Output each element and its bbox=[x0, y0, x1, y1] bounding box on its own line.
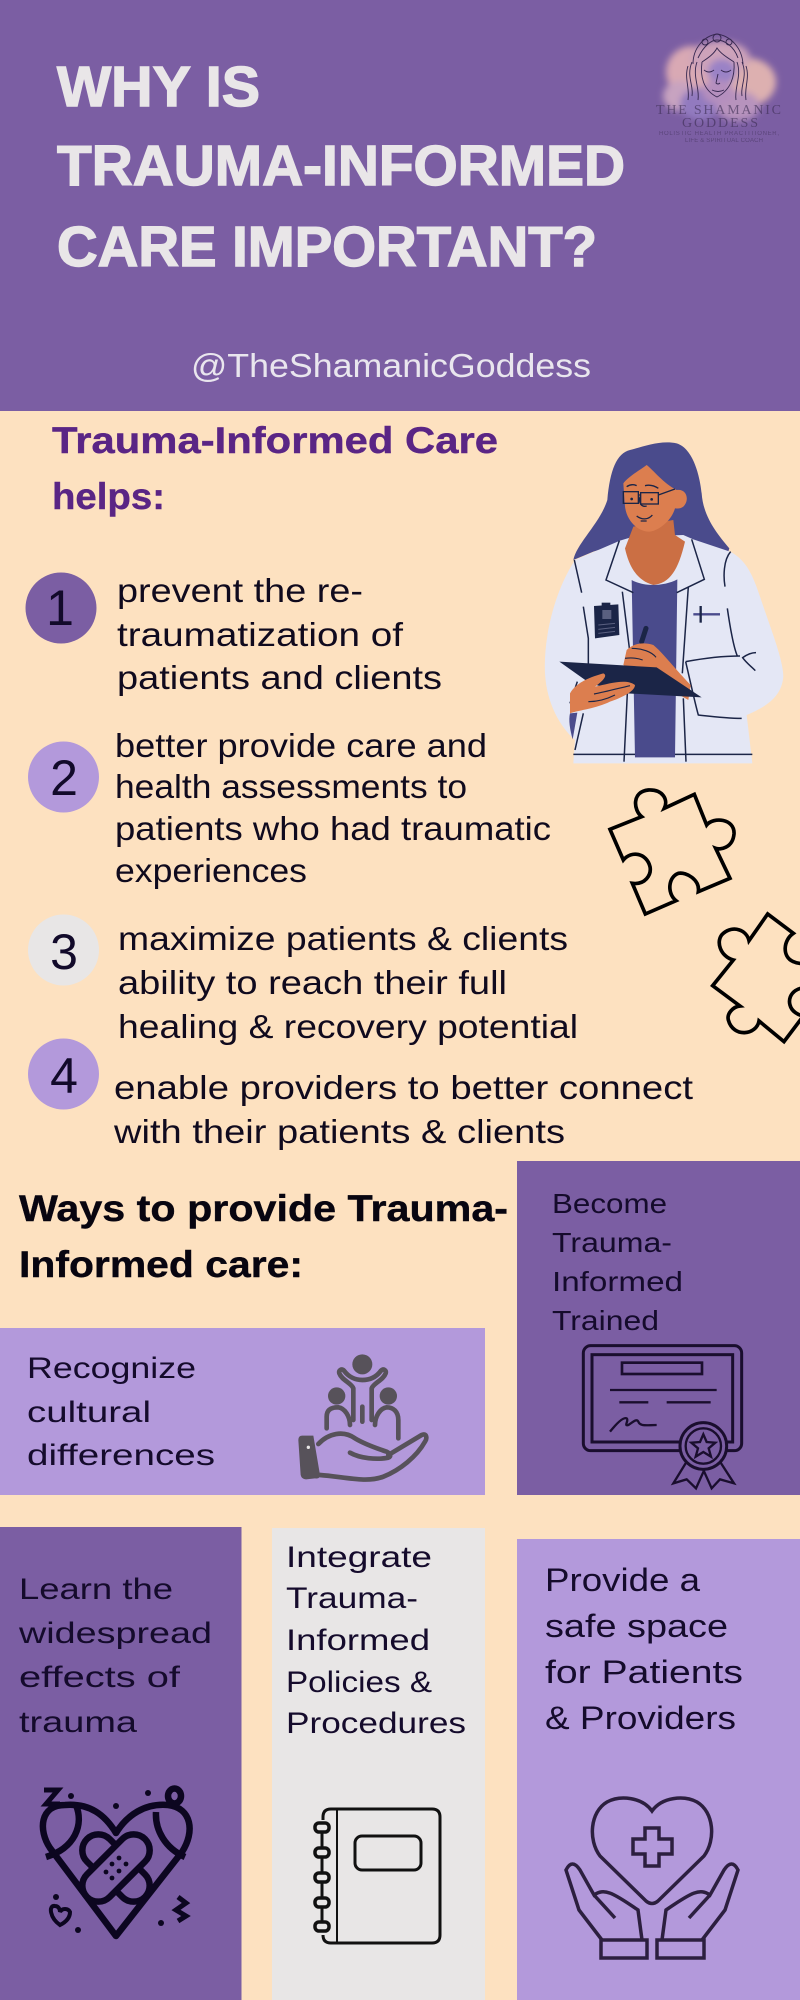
panel: become trauma-informed trained: Trained bbox=[552, 1305, 659, 1336]
panel: integrate policies and procedures: Integrate bbox=[286, 1541, 432, 1574]
item 2: 2 bbox=[50, 750, 78, 806]
heading: Trauma-Informed Care helps: helps: bbox=[52, 476, 165, 517]
logo: The Shamanic Goddess: HOLISTIC HEALTH PRACTITIONER, bbox=[659, 131, 779, 137]
illustration: doctor with clipboard bbox=[545, 442, 783, 763]
panel: become trauma-informed trained: Become bbox=[552, 1188, 667, 1219]
panel: provide a safe space: Provide a bbox=[545, 1562, 700, 1598]
item 3: ability to reach their full bbox=[118, 964, 507, 1001]
item 2: experiences bbox=[115, 852, 307, 889]
social handle: @TheShamanicGoddess bbox=[191, 347, 591, 384]
item 1: patients and clients bbox=[117, 659, 442, 696]
title bbox=[57, 55, 625, 279]
panel: learn the widespread effects bbox=[0, 1527, 242, 2000]
heading: ways to provide care bbox=[19, 1188, 508, 1285]
heading: ways to provide care: Ways to provide Trauma- bbox=[19, 1188, 508, 1229]
icon: heart with bandage bbox=[43, 1788, 190, 1936]
panel: recognize cultural differences: cultural bbox=[27, 1396, 151, 1429]
icon: notebook bbox=[315, 1809, 440, 1943]
panel: learn the widespread effects: trauma bbox=[19, 1706, 137, 1739]
panel: learn the widespread effects: widespread bbox=[18, 1617, 212, 1650]
panel: provide a safe space bbox=[517, 1539, 800, 2000]
panel: integrate policies and procedures: Trauma- bbox=[286, 1582, 418, 1615]
title: WHY IS bbox=[57, 55, 260, 119]
logo: The Shamanic Goddess: GODDESS bbox=[682, 116, 758, 131]
heading: Trauma-Informed Care helps bbox=[52, 420, 498, 517]
panel: provide a safe space: safe space bbox=[545, 1608, 728, 1644]
item 4: enable providers to better connect bbox=[114, 1069, 693, 1106]
panel: become trauma-informed trained bbox=[517, 1161, 800, 1495]
panel: provide a safe space: & Providers bbox=[545, 1700, 736, 1736]
item 4: 4 bbox=[50, 1048, 78, 1104]
icon: certificate with seal bbox=[583, 1346, 742, 1488]
panel: integrate policies and procedures bbox=[272, 1528, 485, 2000]
panel: recognize cultural differences: differences bbox=[27, 1439, 215, 1472]
panel: learn the widespread effects: Learn the bbox=[19, 1573, 173, 1606]
item 2: better provide care and bbox=[115, 727, 487, 764]
panel: become trauma-informed trained: Trauma- bbox=[552, 1227, 672, 1258]
item 1: 1 bbox=[46, 580, 74, 636]
panel: integrate policies and procedures: Procedures bbox=[286, 1707, 466, 1740]
heading: Trauma-Informed Care helps: Trauma-Informed Care bbox=[52, 420, 498, 461]
title: TRAUMA-INFORMED bbox=[57, 134, 625, 198]
logo: The Shamanic Goddess bbox=[656, 34, 781, 144]
panel: integrate policies and procedures: Policies & bbox=[286, 1666, 432, 1699]
panel: provide a safe space: for Patients bbox=[545, 1654, 743, 1690]
icon: hands holding heart bbox=[566, 1798, 738, 1958]
panel: become trauma-informed trained: Informed bbox=[552, 1266, 683, 1297]
item 1 bbox=[26, 572, 442, 696]
item 3: 3 bbox=[50, 924, 78, 980]
panel: recognize cultural differences: Recognize bbox=[27, 1352, 196, 1385]
item 3 bbox=[28, 914, 578, 1045]
title: CARE IMPORTANT? bbox=[57, 215, 597, 279]
icon: puzzle piece top bbox=[610, 790, 734, 914]
item 1: traumatization of bbox=[117, 616, 404, 653]
icon: hand holding people bbox=[298, 1354, 426, 1480]
heading: ways to provide care: Informed care: bbox=[19, 1244, 303, 1285]
item 4: with their patients & clients bbox=[113, 1113, 565, 1150]
item 3: maximize patients & clients bbox=[118, 920, 568, 957]
item 4 bbox=[28, 1038, 693, 1150]
panel: recognize cultural differences bbox=[0, 1328, 485, 1495]
icon: puzzle piece bottom bbox=[713, 914, 800, 1042]
item 2: patients who had traumatic bbox=[115, 810, 551, 847]
item 2 bbox=[28, 727, 551, 889]
panel: integrate policies and procedures: Informed bbox=[286, 1624, 430, 1657]
item 2: health assessments to bbox=[115, 768, 467, 805]
logo: The Shamanic Goddess: LIFE & SPIRITUAL COACH bbox=[685, 138, 763, 144]
item 1: prevent the re- bbox=[117, 572, 363, 609]
item 3: healing & recovery potential bbox=[118, 1008, 578, 1045]
logo: The Shamanic Goddess: THE SHAMANIC bbox=[656, 103, 781, 118]
panel: header bbox=[0, 0, 800, 411]
panel: learn the widespread effects: effects of bbox=[19, 1661, 181, 1694]
